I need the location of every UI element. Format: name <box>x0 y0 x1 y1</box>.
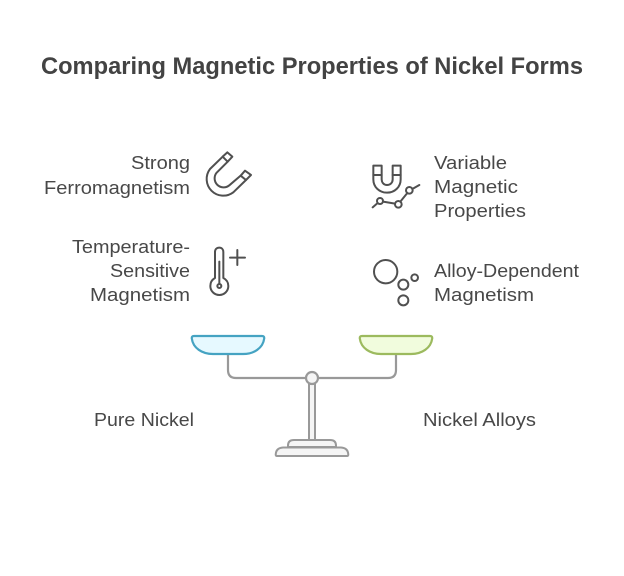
text: Variable Magnetic Properties: Variable <box>434 153 507 173</box>
text: Strong Ferromagnetism: Ferromagnetism <box>44 178 190 198</box>
icon: thermometer with plus <box>210 248 245 295</box>
text: Variable Magnetic Properties: Properties <box>434 201 526 221</box>
right pan: nickel alloys <box>360 336 432 354</box>
title: Comparing Magnetic Properties of Nickel Forms <box>41 53 583 80</box>
icon: magnet with trend line <box>373 166 419 208</box>
text: Variable Magnetic Properties <box>434 153 526 221</box>
scale lower base <box>276 448 348 456</box>
text: Strong Ferromagnetism <box>44 153 190 198</box>
label: Pure Nickel: Pure Nickel <box>94 410 194 430</box>
text: Alloy-Dependent Magnetism <box>434 261 579 305</box>
icon: alloy circles <box>374 260 418 305</box>
text: Variable Magnetic Properties: Magnetic <box>434 177 518 197</box>
scale column <box>309 384 315 440</box>
text: Temperature-Sensitive Magnetism: Magnetism <box>90 285 190 305</box>
icon: horseshoe magnet <box>207 152 251 196</box>
left pan: pure nickel <box>192 336 264 354</box>
scale upper base <box>288 440 336 447</box>
text: Strong Ferromagnetism: Strong <box>131 153 190 173</box>
text: Temperature-Sensitive Magnetism <box>72 237 190 305</box>
scale pivot <box>306 372 318 384</box>
scale beam <box>228 354 396 378</box>
text: Alloy-Dependent Magnetism: Magnetism <box>434 285 534 305</box>
text: Temperature-Sensitive Magnetism: Sensitive <box>110 261 190 281</box>
balance scale <box>192 336 432 456</box>
text: Alloy-Dependent Magnetism: Alloy-Dependent <box>434 261 579 281</box>
text: Temperature-Sensitive Magnetism: Temperature- <box>72 237 190 257</box>
label: Nickel Alloys: Nickel Alloys <box>423 410 536 430</box>
